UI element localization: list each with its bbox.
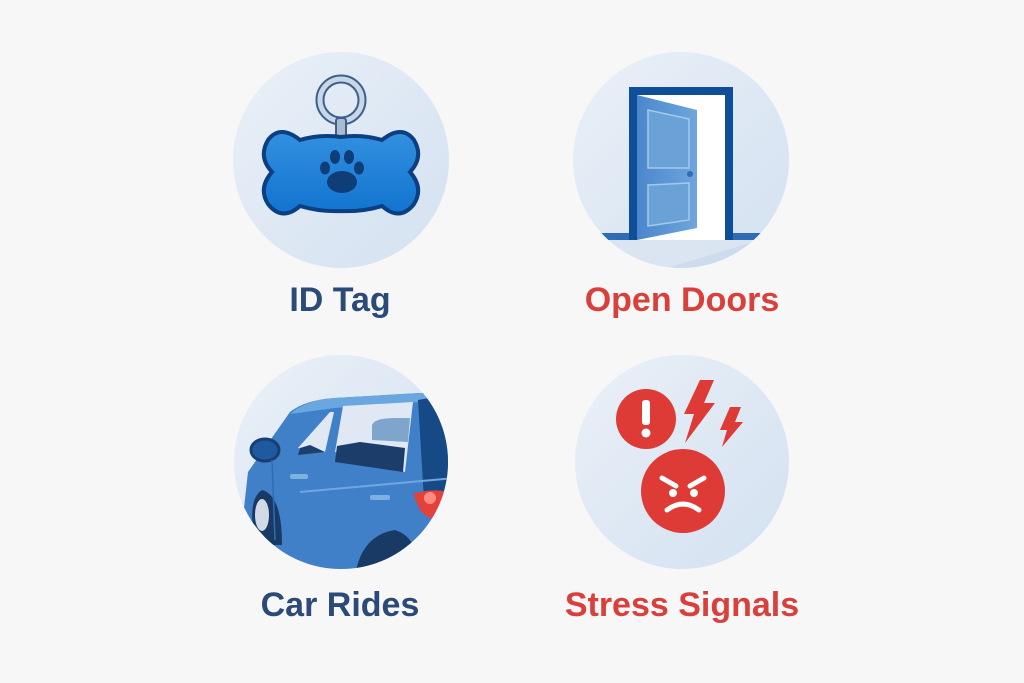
icon: exclamation <box>616 389 676 449</box>
label: Open Doors: Open Doors <box>585 281 779 319</box>
panel: Car Rides <box>234 355 448 569</box>
panel: Open Doors <box>570 52 800 277</box>
circle background: ID Tag <box>233 52 449 268</box>
label: Stress Signals: Stress Signals <box>565 586 799 624</box>
icon: angry face <box>641 449 725 533</box>
label: Car Rides: Car Rides <box>261 586 419 624</box>
icon: paw <box>320 150 364 193</box>
circle background: Stress Signals <box>575 355 789 569</box>
icon: open door <box>602 87 760 268</box>
panel: Stress Signals <box>575 355 789 569</box>
icon: bone tag <box>264 79 418 214</box>
label: ID Tag: ID Tag <box>289 281 391 319</box>
icon: lightning bolts <box>684 380 743 447</box>
panel: ID Tag <box>233 52 449 268</box>
icon: car <box>244 393 448 569</box>
circle background: Car Rides <box>234 355 448 569</box>
circle background: Open Doors <box>573 52 789 268</box>
